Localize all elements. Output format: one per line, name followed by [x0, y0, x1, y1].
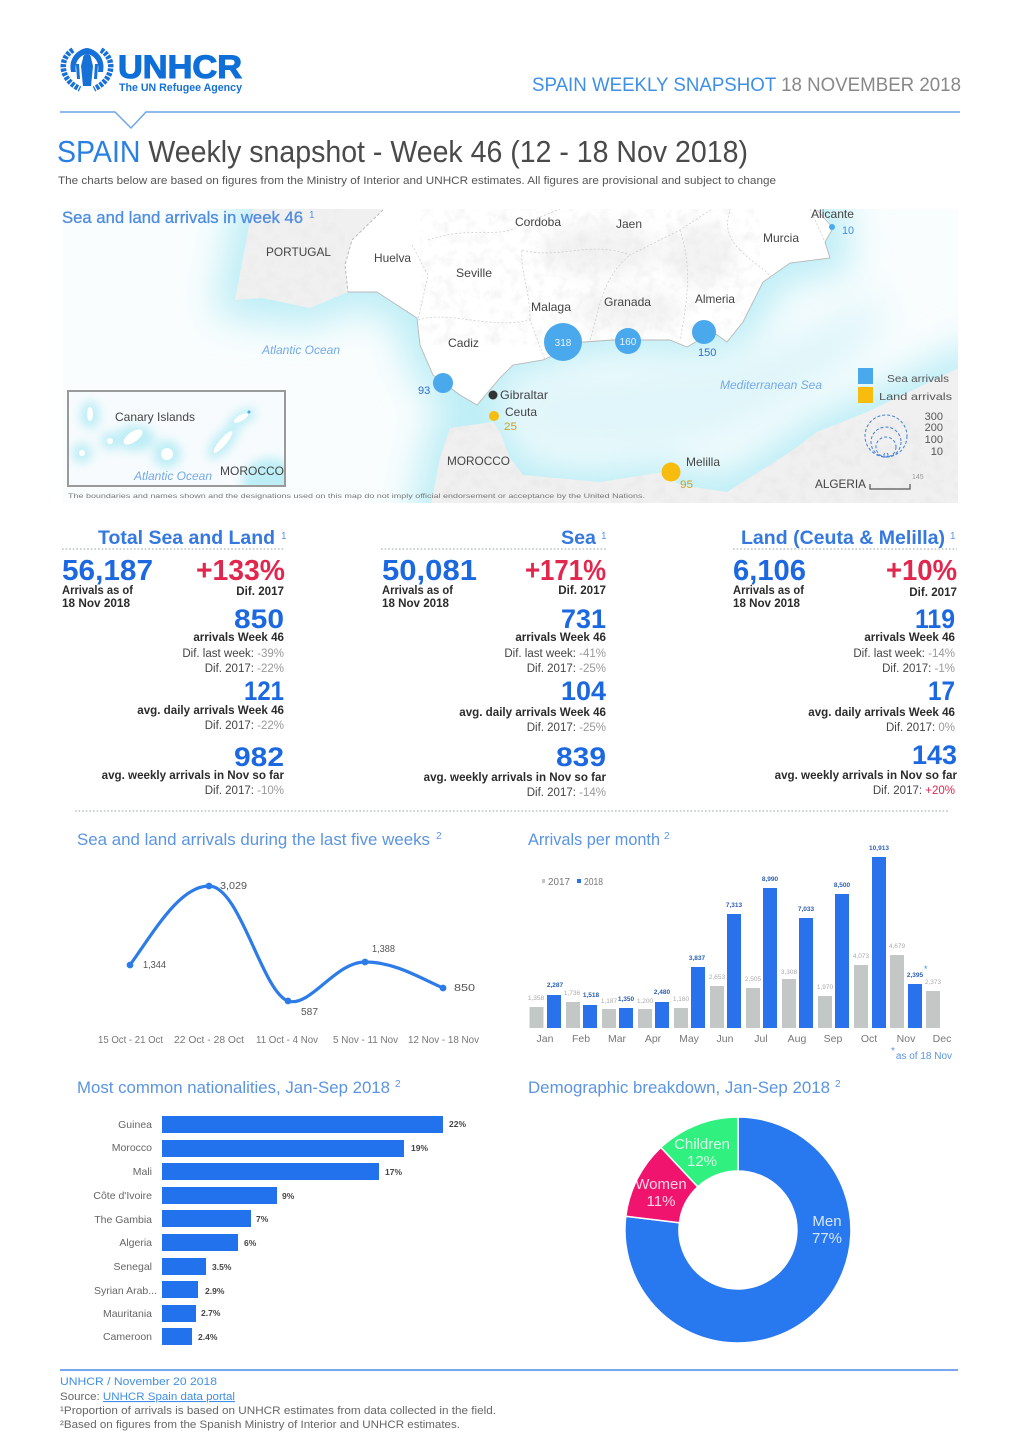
values: 2017: 2,653 — [709, 974, 726, 981]
total arrivals: 50,081 — [382, 555, 477, 587]
footer date: UNHCR / November 20 2018 — [60, 1376, 217, 1388]
note: as of 18 Nov: as of 18 Nov — [896, 1051, 952, 1062]
footnote 1: ¹Proportion of arrivals is based on UNHCR estimates from data collected in the field. — [60, 1405, 496, 1417]
values: 2017: 4,679 — [889, 943, 906, 950]
map legend: 100 — [925, 434, 943, 446]
map place labels: Cordoba — [515, 215, 561, 229]
values: 2017: 1,160 — [673, 996, 690, 1003]
daily average: 121 — [244, 676, 284, 706]
sea glow — [235, 205, 965, 510]
axis labels — [98, 1034, 480, 1046]
values: 2018: 7,033 — [798, 906, 815, 913]
map place labels: Malaga — [531, 300, 571, 314]
weekly arrivals: 119 — [915, 604, 955, 634]
icon: Gibraltar marker — [488, 390, 498, 400]
panel: Total Sea and Land: Dif. 2017: -22% — [205, 663, 284, 675]
values: 2018: 2,395 — [907, 972, 924, 979]
map place labels: Almeria — [695, 292, 735, 306]
panel: Total Sea and Land: avg. daily arrivals Week 46 — [137, 704, 285, 717]
weekly average: 839 — [556, 742, 606, 772]
heading: Sea and land arrivals during the last five weeks — [77, 831, 430, 849]
legend: 2018 — [584, 877, 603, 888]
legend: 2017 — [548, 877, 570, 888]
panel: Land (Ceuta and Melilla): avg. daily arrivals Week 46 — [808, 706, 956, 719]
value labels — [198, 1119, 466, 1342]
scale bar — [870, 474, 924, 489]
axis labels: 22 Oct - 28 Oct — [174, 1034, 244, 1046]
land: Portugal — [235, 205, 385, 308]
month labels: Aug — [788, 1033, 806, 1045]
values: 2017: 1,187 — [601, 998, 618, 1005]
map heading footnote mark: 1 — [309, 210, 315, 221]
heading: Land (Ceuta & Melilla) — [741, 528, 945, 549]
values: 2018: 7,313 — [726, 902, 743, 909]
change vs 2017: +133% — [196, 555, 285, 587]
values: 2017: 2,373 — [925, 979, 942, 986]
values: 2018: 8,500 — [834, 882, 851, 889]
map place labels: ALGERIA — [815, 477, 866, 491]
values: 2018: 10,913 — [869, 845, 889, 852]
data labels: 587 — [301, 1007, 318, 1018]
panel: Total Sea and Land: 18 Nov 2018 — [62, 597, 131, 610]
bubble value labels: 93 — [418, 385, 430, 397]
map place labels — [261, 207, 866, 491]
panel: arrivals per month bar chart: 2 — [664, 831, 670, 842]
bubble value labels: 95 — [680, 479, 693, 491]
panel: Sea: avg. weekly arrivals in Nov so far — [424, 771, 606, 784]
map place labels: Murcia — [763, 231, 799, 245]
total caption: Arrivals as of — [733, 584, 804, 597]
weekly arrivals: 731 — [561, 604, 606, 634]
values: 2018: 2,480 — [654, 989, 671, 996]
country labels: Guinea — [118, 1119, 152, 1131]
country labels: Mali — [133, 1166, 152, 1178]
header label: SPAIN WEEKLY SNAPSHOT 18 NOVEMBER 2018 — [532, 75, 961, 96]
legend — [542, 877, 603, 888]
map place labels: Granada — [604, 295, 651, 309]
map legend: Sea arrivals — [887, 373, 949, 385]
value labels: 6% — [244, 1238, 257, 1248]
panel: Land (Ceuta and Melilla): 18 Nov 2018 — [733, 597, 801, 610]
inset: Canary Islands — [67, 390, 286, 487]
change vs 2017: +10% — [886, 555, 957, 587]
footer source: Source: UNHCR Spain data portal — [60, 1391, 235, 1403]
country labels: Syrian Arab... — [94, 1285, 157, 1297]
values: 2017: 1,200 — [637, 998, 654, 1005]
map place labels: Jaen — [616, 217, 642, 231]
panel: Total Sea and Land: Dif. 2017: -10% — [205, 785, 284, 797]
label: inset Morocco: MOROCCO — [220, 464, 284, 478]
values: 2017: 4,073 — [853, 953, 870, 960]
panel: Total Sea and Land: 1 — [281, 531, 287, 542]
month labels: Feb — [572, 1033, 590, 1045]
logo tagline: The UN Refugee Agency — [119, 82, 243, 94]
header rule with notch — [60, 112, 960, 128]
panel: Sea: Dif. last week: -41% — [504, 648, 606, 660]
axis labels: 5 Nov - 11 Nov — [333, 1034, 399, 1046]
values: 2017 — [528, 943, 942, 1005]
segment: Women — [626, 1147, 698, 1223]
value labels: 3.5% — [212, 1262, 232, 1272]
panel: Sea: Dif. 2017 — [558, 584, 606, 597]
heading: Sea — [561, 528, 596, 549]
month labels: Jul — [754, 1033, 768, 1045]
weekly average: 143 — [912, 740, 957, 770]
heading: Demographic breakdown, Jan-Sep 2018 — [528, 1079, 830, 1097]
bubbles: land arrivals — [489, 411, 680, 482]
bubbles: sea arrivals by province: 160 — [620, 337, 637, 348]
total caption: Arrivals as of — [62, 584, 133, 597]
value labels: 2.4% — [198, 1332, 218, 1342]
total arrivals: 56,187 — [62, 555, 153, 587]
month labels: May — [679, 1033, 700, 1045]
month labels — [537, 1033, 951, 1045]
month labels: Apr — [645, 1033, 662, 1045]
panel: Land (Ceuta and Melilla) — [733, 528, 957, 797]
panel: Land (Ceuta and Melilla): Dif. 2017: +20% — [873, 785, 955, 797]
land: North Africa — [430, 365, 965, 510]
month labels: Jan — [537, 1033, 554, 1045]
footer — [60, 1370, 958, 1431]
axis labels: 12 Nov - 18 Nov — [408, 1034, 480, 1046]
weekly arrivals: 850 — [234, 604, 284, 634]
values: 2017: 1,736 — [564, 990, 581, 997]
map legend: Land arrivals — [879, 391, 952, 403]
map place labels: Seville — [456, 266, 492, 280]
bubble value labels: 150 — [698, 347, 716, 359]
panel: Sea: Dif. 2017: -14% — [527, 787, 606, 799]
values: 2018: 1,350 — [618, 996, 635, 1003]
value labels: 7% — [256, 1214, 269, 1224]
value labels: 2.7% — [201, 1308, 221, 1318]
label: Canary Islands: Canary Islands — [115, 410, 195, 424]
data labels: 1,344 — [143, 960, 166, 971]
value labels: 19% — [411, 1143, 428, 1153]
daily average: 17 — [928, 676, 955, 706]
data labels — [143, 881, 476, 1018]
heading: Most common nationalities, Jan-Sep 2018 — [77, 1079, 390, 1097]
data points — [127, 883, 446, 1004]
bubbles: sea arrivals by province — [433, 224, 835, 393]
panel: nationalities bar chart — [77, 1079, 466, 1345]
country labels — [93, 1119, 157, 1343]
axis labels: 15 Oct - 21 Oct — [98, 1034, 163, 1046]
footnote 2: ²Based on figures from the Spanish Ministry of Interior and UNHCR estimates. — [60, 1419, 460, 1431]
segment: Children — [661, 1117, 738, 1187]
panel: Land (Ceuta and Melilla): Dif. last week: -14% — [853, 648, 955, 660]
donut labels: 77% — [812, 1230, 842, 1247]
panel: Sea: avg. daily arrivals Week 46 — [459, 706, 607, 719]
values: 2018: 2,287 — [547, 982, 564, 989]
values: 2017: 1,358 — [528, 995, 545, 1002]
values: 2018: * — [924, 964, 928, 974]
values: 2018: 3,837 — [689, 955, 706, 962]
bars: 2017 — [530, 955, 940, 1028]
panel: map of sea and land arrivals — [62, 205, 965, 510]
map place labels: Cadiz — [448, 336, 479, 350]
bars — [162, 1116, 443, 1345]
icon: UNHCR emblem — [63, 48, 111, 89]
map place labels: Gibraltar — [500, 388, 548, 402]
land: Spain — [345, 205, 833, 405]
bubble value labels: 25 — [504, 421, 517, 433]
month labels: Mar — [608, 1033, 627, 1045]
map disclaimer: The boundaries and names shown and the designations used on this map do not imply official endorsement or acceptance by the United Nations. — [68, 494, 645, 500]
map place labels: Huelva — [374, 251, 411, 265]
value labels: 22% — [449, 1119, 466, 1129]
change vs 2017: +171% — [525, 555, 606, 587]
values: 2017: 3,308 — [781, 969, 798, 976]
donut labels: Women — [635, 1176, 687, 1193]
panel: Total Sea and Land: avg. weekly arrivals in Nov so far — [102, 769, 284, 782]
map place labels: Mediterranean Sea — [720, 380, 822, 392]
total arrivals: 6,106 — [733, 555, 806, 587]
map place labels: MOROCCO — [447, 454, 510, 468]
heading: Arrivals per month — [528, 831, 660, 849]
panel: Sea: arrivals Week 46 — [515, 631, 607, 644]
month labels: Oct — [861, 1033, 877, 1045]
month labels: Jun — [717, 1033, 734, 1045]
donut labels: 11% — [647, 1193, 675, 1210]
values: 2017: 2,505 — [745, 976, 762, 983]
value labels: 17% — [385, 1167, 402, 1177]
donut labels: 12% — [687, 1153, 717, 1170]
panel: Sea: Dif. 2017: -25% — [527, 722, 606, 734]
panel: Land (Ceuta and Melilla): 1 — [950, 531, 956, 542]
values: 2018 — [547, 845, 928, 1003]
data labels: 1,388 — [372, 944, 395, 955]
country labels: Algeria — [119, 1237, 152, 1249]
panel: demographic breakdown donut: 2 — [835, 1079, 841, 1090]
panel: Sea: 18 Nov 2018 — [382, 597, 450, 610]
month labels: Nov — [897, 1033, 916, 1045]
bubbles: sea arrivals by province: 318 — [555, 338, 572, 349]
map place labels: Alicante — [811, 207, 854, 221]
panel: Sea — [381, 528, 607, 799]
logo wordmark: UNHCR — [118, 49, 242, 85]
scale bar: 145 — [912, 474, 924, 481]
country labels: The Gambia — [94, 1214, 152, 1226]
map legend: 300 — [925, 411, 943, 423]
map place labels: Atlantic Ocean — [261, 345, 340, 357]
panel: nationalities bar chart: 2 — [395, 1079, 401, 1090]
subtitle: The charts below are based on figures from the Ministry of Interior and UNHCR estimates. All figures are provisional and subject to change — [58, 175, 776, 187]
panel: arrivals per month bar chart — [528, 831, 952, 1062]
note: as of 18 Nov: * — [891, 1046, 895, 1057]
panel: five-week line chart: 2 — [436, 831, 442, 842]
line series — [130, 886, 443, 1002]
panel: Total Sea and Land — [62, 528, 287, 797]
panel: Land (Ceuta and Melilla): Dif. 2017 — [909, 586, 957, 599]
map place labels: PORTUGAL — [266, 245, 331, 259]
panel: Total Sea and Land: Dif. last week: -39% — [182, 648, 284, 660]
country labels: Senegal — [113, 1261, 152, 1273]
panel: Land (Ceuta and Melilla): Dif. 2017: 0% — [886, 722, 955, 734]
value labels: 2.9% — [205, 1286, 225, 1296]
panel: Land (Ceuta and Melilla): Dif. 2017: -1% — [882, 663, 955, 675]
panel: Total Sea and Land: Dif. 2017: -22% — [205, 720, 284, 732]
bubble value labels — [418, 225, 854, 491]
label: inset Atlantic Ocean: Atlantic Ocean — [133, 471, 212, 483]
panel: Sea: 1 — [601, 531, 607, 542]
map place labels: Ceuta — [505, 405, 537, 419]
panel: Sea: Dif. 2017: -25% — [527, 663, 606, 675]
bars: 2018 — [547, 857, 922, 1028]
map place labels: Melilla — [686, 455, 720, 469]
country labels: Morocco — [112, 1142, 152, 1154]
heading: Total Sea and Land — [98, 528, 275, 549]
daily average: 104 — [561, 676, 606, 706]
month labels: Sep — [824, 1033, 842, 1045]
title: SPAIN Weekly snapshot - Week 46 (12 - 18 Nov 2018) — [57, 134, 748, 169]
month labels: Dec — [933, 1033, 951, 1045]
panel: Total Sea and Land: Dif. 2017 — [236, 585, 284, 598]
donut labels: Children — [674, 1136, 730, 1153]
panel: demographic breakdown donut — [528, 1079, 851, 1343]
donut labels: Men — [812, 1213, 842, 1230]
country labels: Mauritania — [103, 1308, 152, 1320]
weekly average: 982 — [234, 742, 284, 772]
map heading: Sea and land arrivals in week 46 — [62, 209, 303, 227]
data labels: 850 — [454, 983, 476, 994]
map legend — [858, 368, 952, 458]
country labels: Cameroon — [103, 1331, 152, 1343]
donut labels — [635, 1136, 842, 1247]
value labels: 9% — [282, 1191, 295, 1201]
data labels: 3,029 — [220, 881, 247, 892]
values: 2017: 1,970 — [817, 984, 834, 991]
bubble value labels: 10 — [842, 225, 854, 237]
total caption: Arrivals as of — [382, 584, 453, 597]
header logo: UNHCR — [63, 48, 243, 94]
panel: Total Sea and Land: arrivals Week 46 — [193, 631, 285, 644]
segment: Men — [625, 1117, 851, 1343]
panel: five-week line chart — [77, 831, 480, 1046]
panel: Land (Ceuta and Melilla): arrivals Week 46 — [864, 631, 956, 644]
map legend: 200 — [925, 422, 943, 434]
panel: Land (Ceuta and Melilla): avg. weekly arrivals in Nov so far — [775, 769, 957, 782]
values: 2018: 8,990 — [762, 876, 779, 883]
axis labels: 11 Oct - 4 Nov — [256, 1034, 319, 1046]
country labels: Côte d'Ivoire — [93, 1190, 152, 1202]
values: 2018: 1,518 — [583, 992, 600, 999]
map legend: 10 — [931, 446, 943, 458]
